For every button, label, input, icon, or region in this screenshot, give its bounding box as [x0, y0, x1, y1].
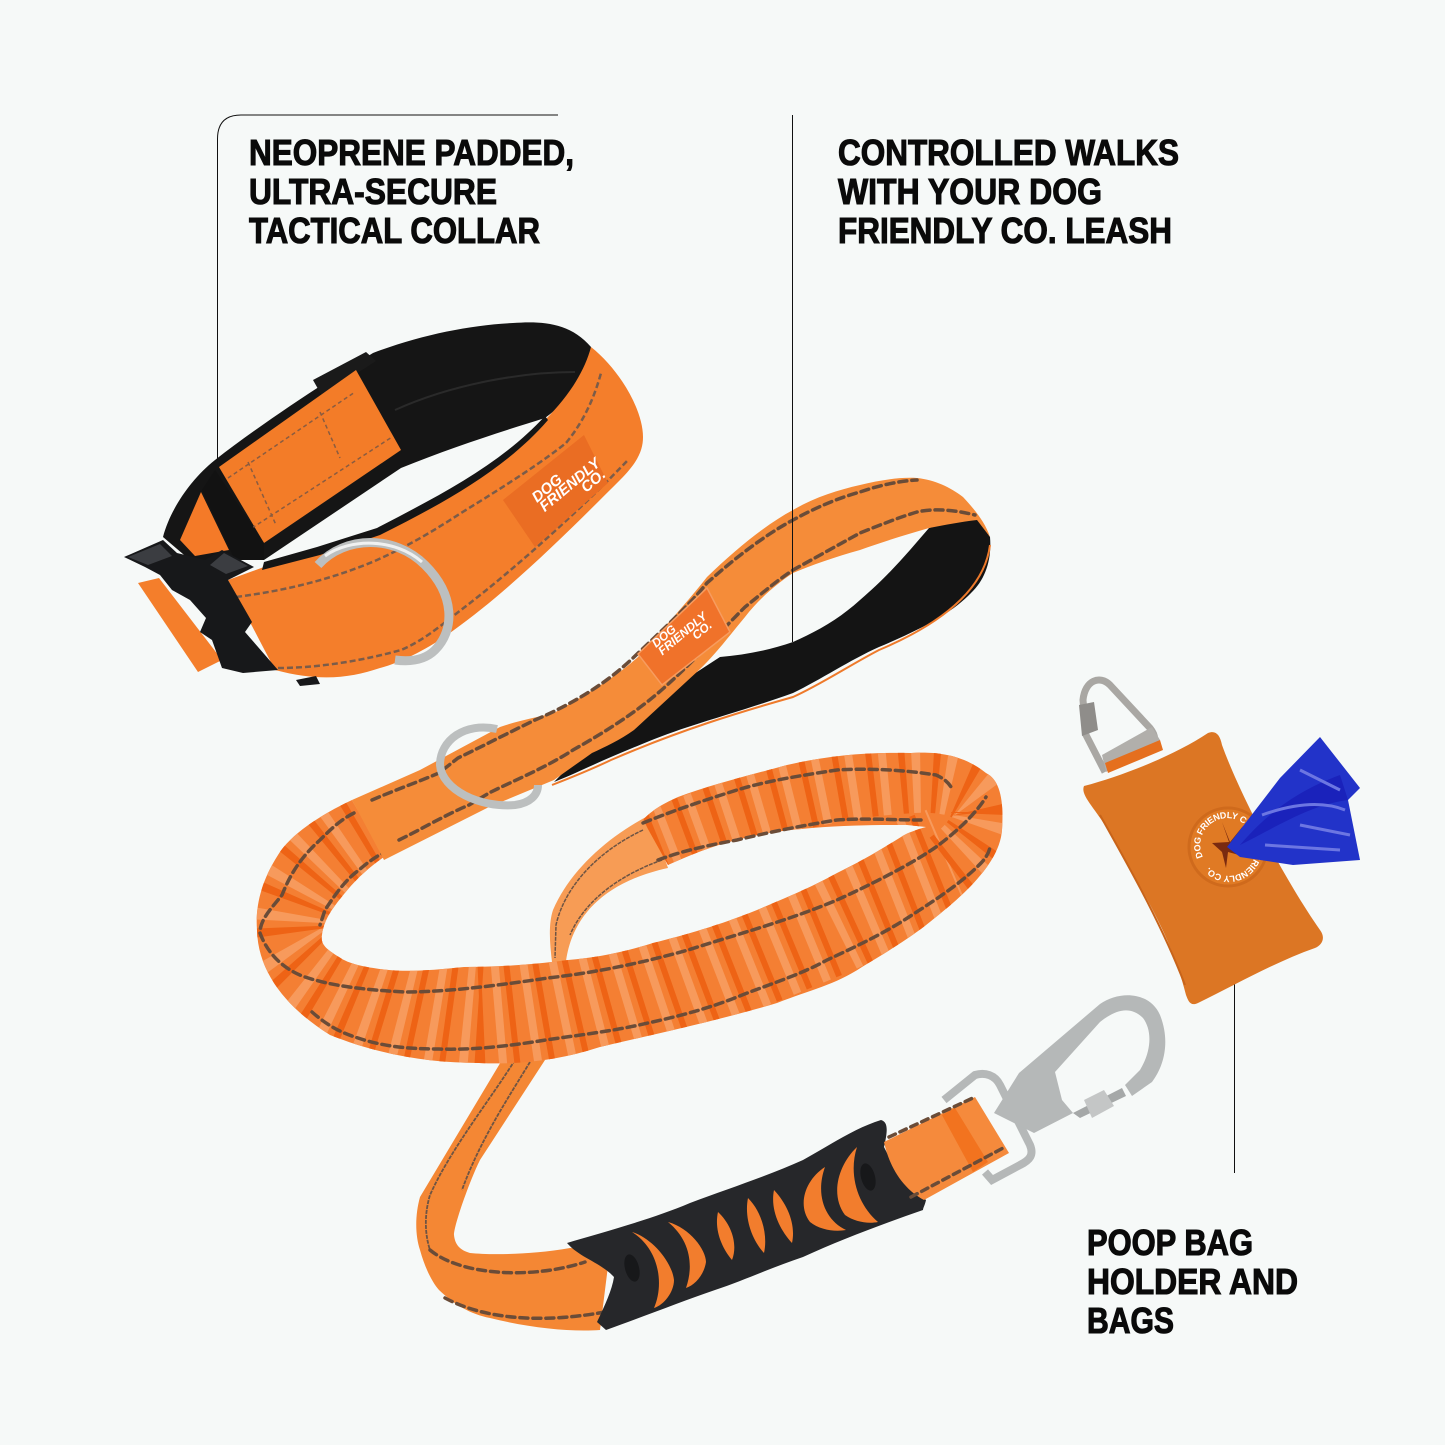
carabiner: [1083, 680, 1155, 772]
heading: poop bag: BAGS: [1087, 1300, 1174, 1341]
collar brand patch: FRIENDLY: [536, 453, 605, 515]
leash brand patch: [638, 588, 730, 685]
heading: leash: CONTROLLED WALKS: [838, 132, 1179, 173]
callout line: poop bag: [1234, 975, 1236, 1173]
heading: collar: ULTRA-SECURE: [249, 171, 497, 212]
blue bag: [1227, 737, 1360, 865]
leash brand patch: FRIENDLY: [655, 609, 710, 658]
heading: leash: FRIENDLY CO. LEASH: [838, 210, 1172, 251]
collar stitching: [236, 373, 628, 668]
pouch strap: [1105, 740, 1163, 773]
heading: leash: WITH YOUR DOG: [838, 171, 1102, 212]
collar black lining: [163, 322, 591, 560]
handle orange edge: [552, 545, 990, 785]
pouch badge: DOG FRIENDLY CO. DOG FRIENDLY CO.: [1194, 812, 1260, 882]
heading: collar: [249, 132, 574, 251]
callout line: leash: [792, 115, 794, 642]
keeper: [313, 352, 376, 396]
back strap: [219, 370, 401, 543]
heading: poop bag: [1087, 1222, 1298, 1341]
leash brand patch: CO.: [689, 618, 715, 642]
leash brand patch: DOG: [649, 622, 679, 650]
poop bag holder: [1079, 676, 1360, 1004]
leash D-ring: [440, 727, 538, 805]
tactical collar: [124, 322, 643, 686]
top webbing tail: [550, 815, 668, 962]
callout line: collar: [218, 115, 558, 465]
rubber grip: [567, 1120, 926, 1330]
collar brand patch: [503, 435, 613, 547]
black webbing loop: [202, 470, 264, 560]
heading: leash: [838, 132, 1179, 251]
orange inside strip: [180, 492, 229, 556]
side buckle: [124, 540, 278, 673]
band black edge: [262, 416, 548, 570]
handle black padding: [554, 515, 990, 782]
leash swivel clip: [944, 995, 1165, 1180]
leash flat webbing (lower section): [416, 815, 668, 1330]
collar brand patch: CO.: [578, 466, 609, 496]
heading: collar: TACTICAL COLLAR: [249, 210, 540, 251]
handle loop: [352, 478, 990, 860]
collar D-ring: [318, 542, 449, 661]
handle stitching: [372, 480, 917, 800]
heading: poop bag: POOP BAG: [1087, 1222, 1253, 1263]
collar front band: [228, 347, 643, 677]
grip cut-outs: [632, 1147, 878, 1308]
bungee section: [256, 752, 1002, 1064]
end webbing: [884, 1097, 1009, 1200]
pouch body: [1083, 732, 1323, 1004]
heading: poop bag: HOLDER AND: [1087, 1261, 1298, 1302]
handle orange webbing: [352, 478, 990, 860]
webbing side stitching: [426, 1060, 530, 1250]
collar brand patch: DOG: [529, 471, 566, 506]
heading: collar: NEOPRENE PADDED,: [249, 132, 574, 173]
buckle tab: [138, 578, 222, 672]
bungee stitching: [312, 845, 990, 1049]
